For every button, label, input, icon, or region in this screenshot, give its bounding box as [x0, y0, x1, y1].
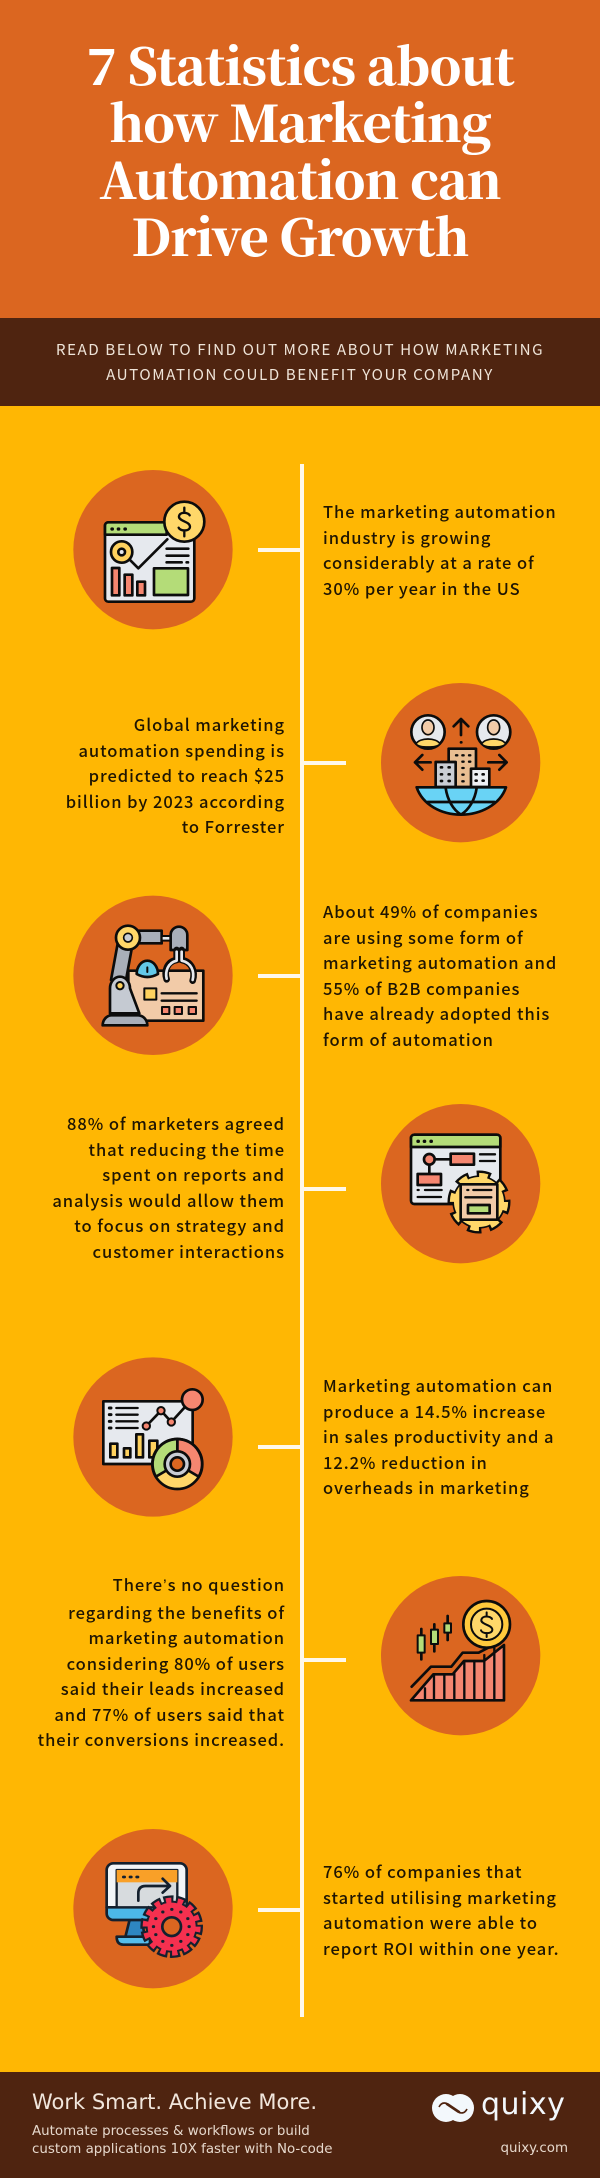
stat 7 text: [323, 1859, 560, 1960]
stat 5 text: Marketing automation can: [323, 1373, 553, 1397]
stat 2 text: automation spending is: [78, 738, 285, 762]
stat 2 text: billion by 2023 according: [66, 788, 285, 812]
stat 7 text: automation were able to: [323, 1910, 538, 1934]
stat 5 text: [323, 1373, 554, 1499]
stat 7 text: started utilising marketing: [323, 1884, 557, 1908]
logo mark: [432, 2094, 474, 2122]
stat 1 text: [323, 499, 557, 600]
stat 4 text: analysis would allow them: [52, 1188, 285, 1212]
stat 4 text: [52, 1111, 285, 1262]
stat 4 text: customer interactions: [93, 1238, 285, 1262]
icon: robotic arm with control panel: [73, 896, 233, 1055]
stat 2 text: Global marketing: [134, 712, 285, 736]
stat 3 text: 55% of B2B companies: [323, 976, 520, 1000]
stat 2 text: to Forrester: [182, 814, 285, 838]
stat 2 text: predicted to reach $25: [89, 763, 285, 787]
stat 6 text: said their leads increased: [61, 1676, 285, 1700]
icon: dashboard with donut chart: [73, 1357, 233, 1517]
stat 6 text: marketing automation: [88, 1625, 285, 1649]
connector 6: [304, 1658, 346, 1662]
footer description: [32, 2124, 333, 2156]
title: Drive Growth: [131, 199, 469, 271]
subtitle text: READ BELOW TO FIND OUT MORE ABOUT HOW MARKETING: [56, 338, 544, 360]
timeline spine: [300, 464, 304, 2017]
icon: rising bars with coin: [381, 1576, 540, 1735]
stat 5 text: 12.2% reduction in: [323, 1450, 488, 1474]
icon: workflow window with gear: [381, 1104, 540, 1263]
stat 1 text: considerably at a rate of: [323, 550, 535, 574]
subtitle text: [56, 338, 544, 385]
logo wordmark: quixy: [481, 2087, 565, 2122]
stat 5 text: produce a 14.5% increase: [323, 1398, 546, 1422]
title: Automation can: [99, 142, 501, 214]
stat 4 text: to focus on strategy and: [74, 1213, 285, 1237]
stat 6 text: [38, 1572, 285, 1751]
footer description: custom applications 10X faster with No-code: [32, 2142, 333, 2156]
header panel: [0, 0, 600, 318]
stat 1 text: industry is growing: [323, 524, 491, 548]
stat 3 text: [323, 899, 557, 1050]
stat 3 text: About 49% of companies: [323, 899, 538, 923]
icon: analytics dashboard with dollar coin: [73, 470, 233, 629]
stat 3 text: form of automation: [323, 1026, 494, 1050]
quixy logo: [432, 2087, 565, 2122]
stat 6 text: their conversions increased.: [38, 1727, 285, 1751]
icon: monitor with red gear: [73, 1829, 233, 1988]
stat 1 text: The marketing automation: [323, 499, 557, 523]
stat 7 text: report ROI within one year.: [323, 1936, 560, 1960]
stat 3 text: have already adopted this: [323, 1001, 550, 1025]
stat 5 text: overheads in marketing: [323, 1475, 530, 1499]
stat 3 text: marketing automation and: [323, 950, 557, 974]
subtitle band: [0, 318, 600, 406]
connector 1: [258, 548, 300, 552]
connector 3: [258, 974, 300, 978]
stat 4 text: 88% of marketers agreed: [67, 1111, 285, 1135]
footer url: quixy.com: [500, 2141, 568, 2156]
footer tagline: Work Smart. Achieve More.: [32, 2090, 317, 2114]
stat 6 text: There’s no question: [113, 1572, 285, 1596]
stat 2 text: [66, 712, 285, 838]
stat 6 text: and 77% of users said that: [54, 1702, 285, 1726]
stat 7 text: 76% of companies that: [323, 1859, 522, 1883]
connector 2: [304, 761, 346, 765]
connector 5: [258, 1445, 300, 1449]
connector 7: [258, 1908, 300, 1912]
stat 6 text: considering 80% of users: [67, 1650, 285, 1674]
connector 4: [304, 1187, 346, 1191]
subtitle text: AUTOMATION COULD BENEFIT YOUR COMPANY: [106, 363, 494, 385]
stat 1 text: 30% per year in the US: [323, 576, 521, 600]
stat 4 text: that reducing the time: [88, 1136, 285, 1160]
title: 7 Statistics about: [86, 28, 514, 100]
stat 6 text: regarding the benefits of: [68, 1600, 285, 1624]
footer description: Automate processes & workflows or build: [32, 2124, 310, 2139]
title: [86, 28, 515, 271]
icon: global business network: [381, 683, 540, 842]
stat 5 text: in sales productivity and a: [323, 1424, 554, 1448]
stat 3 text: are using some form of: [323, 924, 524, 948]
footer panel: [0, 2072, 600, 2178]
stat 4 text: spent on reports and: [102, 1162, 285, 1186]
title: how Marketing: [109, 85, 491, 157]
